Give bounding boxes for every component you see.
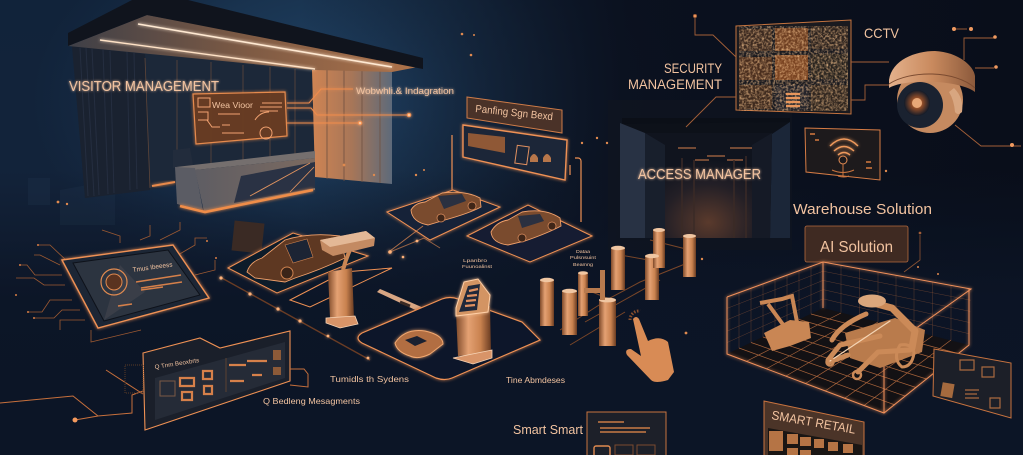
- barrier post and camera: [320, 231, 375, 328]
- robot arm left: [760, 296, 811, 351]
- bollards / turnstile: [540, 228, 696, 346]
- small label: data access: Dataa: [576, 249, 590, 255]
- parking slot: car two: [467, 205, 592, 262]
- roof: [68, 0, 423, 72]
- small label: data access: Beamng: [573, 262, 593, 268]
- panel: wifi: [805, 128, 880, 180]
- label: website integration: Wobwhli.& Indagration: [356, 86, 454, 96]
- parking sign label: [467, 97, 562, 133]
- panel: smart retail: SMART RETAIL: [770, 408, 857, 437]
- ceiling light: [687, 126, 716, 128]
- small panel: warehouse data: [933, 349, 1011, 418]
- panel: web visitor screen: [193, 92, 287, 144]
- heading: security management: [628, 61, 722, 92]
- panel: security tablet: [15, 222, 217, 342]
- floating particles: [57, 33, 939, 334]
- badge: AI solution: [805, 226, 908, 262]
- heading: CCTV: CCTV: [864, 25, 900, 41]
- heading: security management: SECURITY: [664, 61, 722, 76]
- box frame: [727, 262, 971, 413]
- AI badge connector: [904, 232, 921, 272]
- parking sign board: [452, 125, 581, 222]
- monitor wall: [736, 20, 851, 114]
- floor path with dots: [219, 226, 440, 360]
- small label: parking info: [462, 258, 493, 270]
- badge: AI solution: AI Solution: [820, 239, 893, 256]
- heading: visitor management: VISITOR MANAGEMENT: [69, 79, 219, 95]
- panel: smart retail: [764, 401, 864, 455]
- robot arm right: [826, 294, 925, 379]
- label: time attendance: Tine Abmdeses: [506, 375, 565, 385]
- heading: warehouse solution: Warehouse Solution: [793, 201, 932, 218]
- parking sign label: Panfing Sgn Bexd: [475, 103, 554, 123]
- heading: access manager: ACCESS MANAGER: [638, 167, 761, 183]
- label: web visitor: Wea Vioor: [212, 101, 253, 110]
- parking slot: car one: [387, 190, 500, 240]
- pillar: [312, 68, 392, 184]
- small label: parking info: Fuunoalinst: [462, 264, 493, 270]
- dark square behind car: [232, 221, 264, 253]
- parking slot: main car: [228, 233, 392, 307]
- tablet text: Tmus Ibeeess: [132, 261, 174, 274]
- wall grid: [727, 265, 971, 348]
- reception desk: [173, 148, 315, 212]
- building: visitor reception: [68, 0, 423, 212]
- floor grid: [739, 313, 958, 406]
- icon: pointing hand: [626, 311, 674, 382]
- small label: parking info: Lpanbro: [463, 258, 487, 264]
- label: turnstile systems: Tumidls th Sydens: [330, 374, 409, 384]
- label: smart smart: Smart Smart: [513, 423, 584, 437]
- connector lines: camera: [952, 27, 1021, 147]
- kiosk: [453, 279, 492, 364]
- connector lines: folder panel: [0, 365, 308, 422]
- connector lines: web panel: [287, 89, 411, 125]
- small label: data access: Pulsnsuint: [570, 255, 597, 261]
- small label: data access: [570, 249, 597, 268]
- warehouse wireframe box: [727, 262, 971, 413]
- glass wall: [72, 46, 316, 198]
- corridor: access manager: [608, 100, 792, 250]
- connector lines: monitors: [686, 14, 890, 127]
- panel: smart lock: [587, 412, 666, 455]
- icon: dome camera: [889, 51, 975, 133]
- label: bidding messages: Q Bedleng Mesagments: [263, 396, 360, 406]
- panel: folder dashboard: [143, 331, 290, 430]
- panel: folder dashboard: Q Tnm Beoxbrts: [154, 358, 200, 371]
- heading: security management: MANAGEMENT: [628, 77, 722, 92]
- boom gate arm: [377, 289, 456, 328]
- parking zone with car: [358, 298, 540, 380]
- circuit traces: [16, 222, 215, 342]
